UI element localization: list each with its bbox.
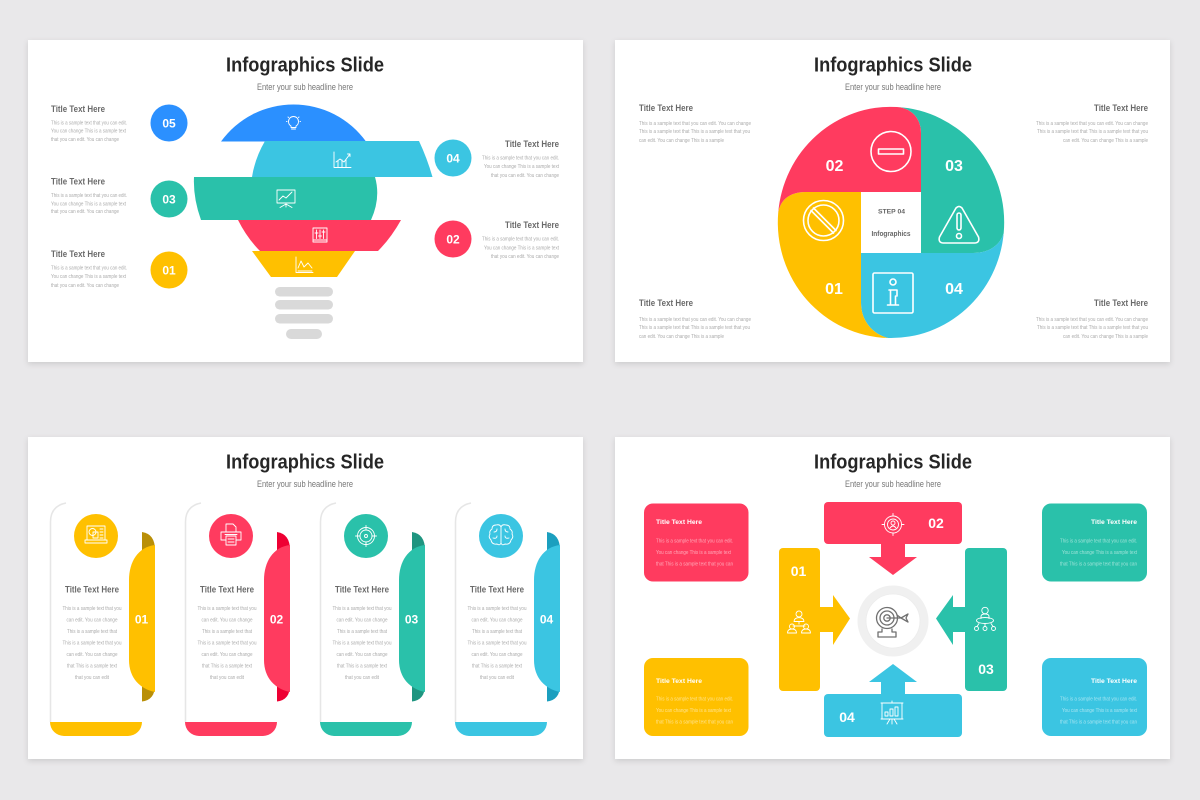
text block: step 03: You can change This is a sample text [51,202,127,208]
callout: yellow [644,658,748,736]
text block: step 02: can edit. You can change This is a sample [639,138,724,144]
card body: that This is a sample text [202,664,253,670]
label: centre step: STEP 04 [878,210,906,216]
text block: step 03: This is a sample text that you can edit. [51,193,127,199]
card body: This is a sample text that you [332,640,392,646]
icon: growth chart [334,152,351,168]
card body: that This is a sample text [67,664,118,670]
badge: 03 [150,180,188,218]
text block: step 01: You can change This is a sample text [51,274,127,280]
card body: This is a sample text that [472,629,523,635]
callout: teal: that This is a sample text that you can [1060,562,1137,568]
card body: This is a sample text that you [332,606,392,612]
icon: presentation board [277,190,295,208]
text block: step 03 [1036,103,1148,144]
icon: prohibited [804,200,844,240]
text block: step 05: Title Text Here [51,104,105,115]
text block: step 05: This is a sample text that you can edit. [51,120,127,126]
card title: Title Text Here [470,584,524,596]
icon: information [873,273,913,313]
card body: This is a sample text that [67,629,118,635]
number: 02 [270,612,283,626]
text block: step 04: This is a sample text that This is a sample text that you [1037,325,1148,331]
text block: step 04: that you can edit. You can change [491,173,559,179]
card body [198,606,257,681]
icon: sliders [313,228,327,242]
card body: that This is a sample text [472,664,523,670]
badge: 05: 05 [162,116,176,130]
callout: teal: Title Text Here [1091,520,1138,526]
card title: Title Text Here [335,584,389,596]
text block: step 04: This is a sample text that you can edit. You can change [1036,317,1148,323]
text block: step 04: Title Text Here [1094,298,1148,309]
text block: step 04: This is a sample text that you can edit. [482,156,559,162]
card body: can edit. You can change [66,618,118,624]
card: 03 [320,503,425,736]
badge: 01 [150,252,188,288]
chart: four quadrant circle [778,107,1004,338]
arrow: red down: 02 [928,515,944,531]
number: 02: 02 [826,158,844,175]
text block: step 02: Title Text Here [505,220,559,231]
badge: 01: 01 [162,264,176,278]
card body: This is a sample text that you [198,640,257,646]
callout: blue: This is a sample text that you can edit. [1060,696,1137,702]
badge: 02 [434,220,472,258]
arrow: yellow right [779,548,850,691]
callout: blue: that This is a sample text that you can [1060,720,1137,726]
callout: yellow: This is a sample text that you can edit. [656,696,733,702]
text block: step 01 [639,298,751,340]
callout: red: that This is a sample text that you can [656,562,733,568]
card: 04 [455,503,560,736]
text block: step 03: Title Text Here [1094,103,1148,114]
icon: light bulb [286,116,300,129]
number: 03 [405,612,418,626]
icon: team hierarchy [788,611,810,633]
text block: step 01: Title Text Here [51,249,105,260]
heading: cards slide title: Infographics Slide [226,452,384,474]
badge: 03: 03 [162,192,176,206]
callout: yellow: that This is a sample text that you can [656,720,733,726]
text block: step 01: that you can edit. You can change [51,283,119,289]
card body: that This is a sample text [337,664,388,670]
panel: light bulb slide [28,40,583,362]
icon: network person [974,607,996,630]
text block: step 02: This is a sample text that you can edit. [482,236,559,242]
text block: step 04: You can change This is a sample text [484,164,560,170]
number: 04: 04 [945,281,963,298]
text block: step 04 [482,139,560,179]
text block: step 03: This is a sample text that you can edit. You can change [1036,121,1148,127]
panel: circular quadrant slide [615,40,1170,362]
arrow: teal left [936,548,1007,691]
chart: light bulb layers [194,104,432,339]
text block: step 03: that you can edit. You can change [51,209,119,215]
callout: teal: You can change This is a sample text [1062,550,1138,556]
text block: step 04: Title Text Here [505,139,559,150]
text block: step 05 [51,104,127,143]
card title: Title Text Here [200,584,254,596]
callout: yellow: Title Text Here [656,679,703,685]
text block: step 03: Title Text Here [51,176,105,188]
subheading: quadrant slide: Enter your sub headline here [845,82,941,92]
text block: step 02 [482,220,560,260]
callout: red: Title Text Here [656,520,703,526]
heading: quadrant slide title: Infographics Slide [814,54,972,76]
card body: This is a sample text that you [62,640,122,646]
callout: red: This is a sample text that you can edit. [656,538,733,544]
arrow: red down [824,502,962,575]
subheading: bulb slide: Enter your sub headline here [257,82,353,92]
text block: step 02: that you can edit. You can change [491,254,559,260]
card body: can edit. You can change [202,652,253,658]
icon: brain [489,525,513,545]
number: 01: 01 [825,281,843,298]
card body: can edit. You can change [336,652,388,658]
badge: 02: 02 [446,232,460,246]
icon: presentation bars [881,701,903,724]
card body: This is a sample text that you [468,640,527,646]
text block: step 03 [51,176,127,215]
text block: step 05: that you can edit. You can change [51,137,119,143]
icon: crosshair target [356,526,376,546]
number: 04 [540,612,553,626]
card body: can edit. You can change [472,652,523,658]
text block: step 01: This is a sample text that you can edit. You can change [639,317,751,323]
card body [332,606,392,681]
card: 01 [50,503,155,736]
label: centre step: Infographics [872,231,911,238]
callout: red: You can change This is a sample text [656,550,732,556]
callout: blue [1042,658,1147,736]
panel: converging arrows slide [615,437,1170,759]
centre target medallion [858,586,928,656]
text block: step 02: Title Text Here [639,103,693,114]
card body: can edit. You can change [336,618,388,624]
text block: step 04: can edit. You can change This is a sample [1063,334,1148,340]
text block: step 05: You can change This is a sample text [51,128,127,134]
text block: step 01 [51,249,127,289]
card body: can edit. You can change [472,618,523,624]
card body: This is a sample text that you [62,606,122,612]
card title: Title Text Here [65,584,119,596]
card body: This is a sample text that you [198,606,257,612]
icon: printer [221,524,241,545]
card body: This is a sample text that you [468,606,527,612]
card body [62,606,122,681]
text block: step 03: This is a sample text that This is a sample text that you [1037,129,1148,135]
arrow: yellow right: 01 [791,563,806,579]
number: 01 [135,612,148,626]
label: centre step [872,210,911,238]
subheading: arrows slide: Enter your sub headline here [845,479,941,489]
icon: no entry [871,132,911,172]
card body: that you can edit [75,675,110,681]
card body: that you can edit [480,675,515,681]
card body: can edit. You can change [202,618,253,624]
card body: that you can edit [210,675,245,681]
card body [468,606,527,681]
icon: person target [882,514,904,536]
icon: laptop [85,526,107,543]
text block: step 03: can edit. You can change This is a sample [1063,138,1148,144]
badge: 05 [150,104,188,142]
arrow: blue up: 04 [839,709,855,725]
text block: step 04 [1036,298,1148,340]
card body: can edit. You can change [66,652,118,658]
subheading: cards slide: Enter your sub headline here [257,479,353,489]
icon: dartboard [876,608,908,637]
text block: step 01: can edit. You can change This is a sample [639,334,724,340]
badge: 04 [434,140,472,176]
arrow: blue up [824,664,962,737]
callout: blue: Title Text Here [1091,679,1138,685]
badge: 04: 04 [446,152,460,166]
callout: teal: This is a sample text that you can edit. [1060,538,1137,544]
heading: bulb slide title: Infographics Slide [226,54,384,76]
text block: step 02: You can change This is a sample text [484,246,560,252]
heading: arrows slide title: Infographics Slide [814,452,972,474]
icon: line chart [296,257,313,272]
icon: warning triangle [939,206,979,243]
panel: vertical cards slide [28,437,583,759]
text block: step 02 [639,103,751,144]
card body: that you can edit [345,675,380,681]
text block: step 02: This is a sample text that you can edit. You can change [639,121,751,127]
card: 02 [185,503,290,736]
callout: yellow: You can change This is a sample text [656,708,732,714]
callout: teal [1042,504,1147,582]
arrow: teal left: 03 [978,661,994,677]
callout: red [644,504,748,582]
card body: This is a sample text that [202,629,253,635]
text block: step 01: This is a sample text that you can edit. [51,266,127,272]
card body: This is a sample text that [337,629,388,635]
text block: step 02: This is a sample text that This is a sample text that you [639,129,750,135]
callout: blue: You can change This is a sample text [1062,708,1138,714]
text block: step 01: Title Text Here [639,298,693,309]
text block: step 01: This is a sample text that This is a sample text that you [639,325,750,331]
number: 03: 03 [945,158,963,175]
